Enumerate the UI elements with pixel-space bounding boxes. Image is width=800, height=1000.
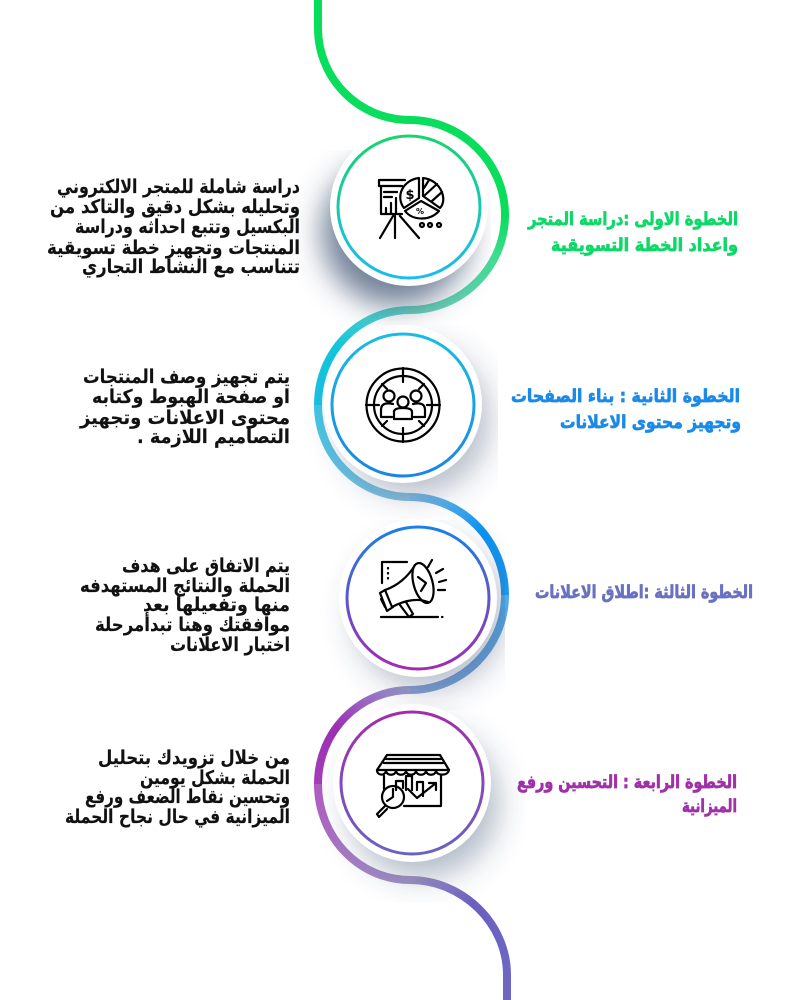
- winding gradient path: [318, 0, 507, 1000]
- text block: step 2: محتوى الاعلانات وتجهيز: [79, 407, 290, 429]
- step 1 circle: [322, 128, 488, 306]
- heading: step 4: [517, 772, 737, 817]
- text block: step 3: الحملة والنتائج المستهدفه: [80, 575, 290, 597]
- text block: step 2: يتم تجهيز وصف المنتجات: [83, 366, 290, 388]
- text block: step 4: من خلال تزويدك بتحليل: [98, 747, 290, 769]
- icon: target audience: [366, 368, 440, 442]
- text block: step 2: او صفحة الهبوط وكتابه: [92, 386, 290, 408]
- text block: step 1: وتحليله بشكل دقيق والتاكد من: [50, 196, 300, 218]
- step 2 circle: [324, 325, 490, 496]
- text block: step 1: [47, 176, 300, 279]
- text block: step 4: وتحسين نقاط الضعف ورفع: [85, 786, 290, 808]
- heading: step 1: [527, 209, 738, 256]
- icon: shop with analytics magnifier: [377, 755, 449, 817]
- heading: step 4: الخطوة الرابعة : التحسين ورفع: [517, 772, 737, 793]
- text block: step 1: المنتجات وتجهيز خطة تسويقية: [47, 237, 300, 259]
- text block: step 4: الحملة بشكل يومين: [140, 767, 290, 789]
- text block: step 2: [79, 366, 290, 448]
- step 3 circle: [339, 519, 505, 690]
- heading: step 2: وتجهيز محتوى الاعلانات: [560, 412, 741, 433]
- text block: step 3: موافقتك وهنا تبدأمرحلة: [95, 612, 290, 636]
- text block: step 3: [80, 555, 290, 656]
- text block: step 1: البكسيل وتتبع احداثه ودراسة: [75, 216, 300, 238]
- icon: megaphone: [380, 560, 446, 617]
- heading: step 1: واعداد الخطة التسويقية: [551, 235, 738, 256]
- icon: presentation board with pie chart: %: [416, 207, 424, 216]
- text block: step 2: التصاميم اللازمة .: [137, 426, 290, 448]
- icon: presentation board with pie chart: $: [405, 188, 415, 203]
- step 4 circle: [333, 704, 499, 878]
- heading: step 2: [511, 386, 741, 433]
- icon: presentation board with pie chart: [379, 178, 443, 238]
- text block: step 1: دراسة شاملة للمتجر الالكتروني: [57, 176, 300, 198]
- text block: step 1: تتناسب مع النشاط التجاري: [82, 256, 300, 279]
- heading: step 2: الخطوة الثانية : بناء الصفحات: [511, 386, 740, 407]
- heading: step 1: الخطوة الاولى :دراسة المتجر: [527, 209, 738, 230]
- heading: step 4: الميزانية: [682, 796, 737, 817]
- text block: step 4: [65, 747, 290, 828]
- text block: step 3: اختبار الاعلانات: [170, 634, 290, 656]
- text block: step 4: الميزانية في حال نجاح الحملة: [65, 806, 290, 828]
- text block: step 3: منها وتفعيلها بعد: [143, 594, 290, 616]
- text block: step 3: يتم الاتفاق على هدف: [122, 555, 290, 577]
